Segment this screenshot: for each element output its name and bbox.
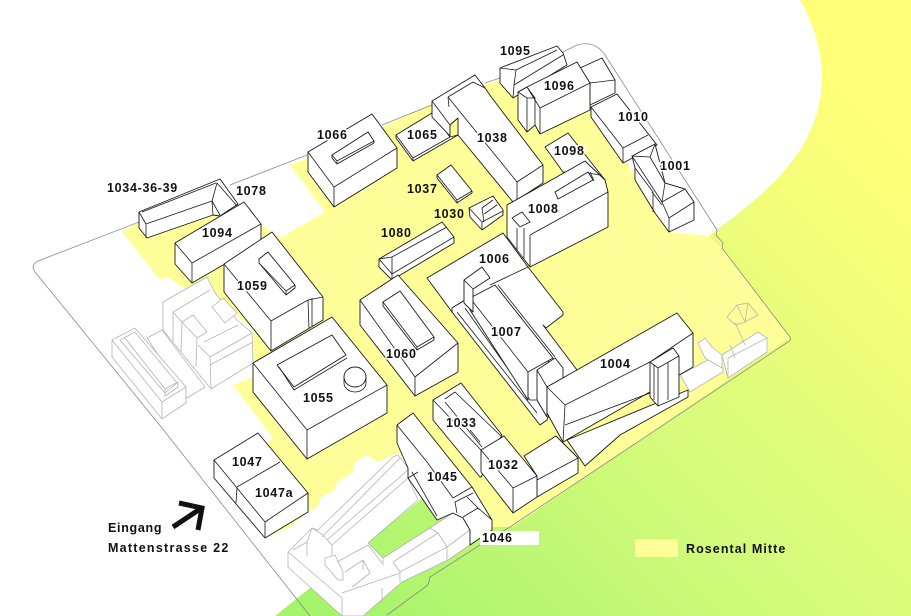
label 1007: 1007 (491, 325, 522, 339)
label 1008: 1008 (528, 202, 559, 216)
label 1038: 1038 (477, 131, 508, 145)
label 1095: 1095 (500, 44, 531, 58)
building 1047 and 1047a (214, 433, 308, 538)
label 1033: 1033 (446, 416, 477, 430)
plinth of building 1007 (452, 300, 563, 425)
label 1065: 1065 (407, 128, 438, 142)
legend label: Rosental Mitte (686, 542, 786, 556)
label 1006: 1006 (479, 252, 510, 266)
building 1065 (396, 113, 458, 161)
label 1078: 1078 (236, 184, 267, 198)
label 1047a: 1047a (255, 486, 294, 500)
building 1059 (224, 232, 323, 351)
yellow Rosental Mitte area (122, 80, 790, 538)
building 1098 (545, 133, 605, 180)
label 1098: 1098 (554, 144, 585, 158)
label 1094: 1094 (202, 226, 233, 240)
label 1032: 1032 (488, 458, 519, 472)
label 1037: 1037 (407, 182, 438, 196)
label 1047: 1047 (232, 455, 263, 469)
building behind 1096 (580, 58, 615, 105)
label 1055: 1055 (303, 391, 334, 405)
slab between blocks (147, 330, 205, 398)
label 1045: 1045 (427, 470, 458, 484)
icon: entrance arrow (173, 503, 202, 530)
building 1045 and 1046 (397, 413, 492, 545)
green to yellow gradient ground (275, 0, 911, 616)
label 1001: 1001 (660, 159, 691, 173)
gray neighbouring complex south (288, 455, 470, 616)
label 1030: 1030 (434, 207, 465, 221)
building 1095 (500, 46, 567, 98)
building 1010 (591, 94, 657, 163)
building 1080 (379, 222, 454, 280)
label 1096: 1096 (544, 79, 575, 93)
label 1034-36-39: 1034-36-39 (107, 181, 178, 195)
building 1066 (308, 114, 397, 207)
building 1096 (518, 62, 590, 134)
label 1059: 1059 (237, 279, 268, 293)
building 1038 (432, 75, 543, 202)
building 1032 extension (524, 436, 578, 497)
main block (163, 277, 253, 389)
label 1004: 1004 (600, 357, 631, 371)
gray neighbouring buildings north-west (112, 277, 253, 419)
west wing and long roof (288, 455, 470, 616)
building 1034-36-39 and 1078 (139, 179, 238, 238)
building 1030 (469, 196, 503, 230)
building 1033 (433, 383, 502, 477)
building 1032 (481, 436, 537, 513)
building 1007 (464, 267, 563, 417)
building 1004 (547, 313, 693, 466)
label 1060: 1060 (386, 347, 417, 361)
west block (112, 328, 186, 419)
labels (107, 44, 691, 545)
entrance text (108, 521, 229, 555)
white strip behind label 1046 (480, 531, 539, 545)
building 1001 (632, 144, 694, 232)
building 1094 (175, 202, 261, 283)
building 1037 (437, 165, 472, 203)
building 1060 (360, 275, 458, 396)
building 1006 (427, 233, 577, 400)
label 1066: 1066 (317, 128, 348, 142)
entrance line 1: Eingang (108, 521, 162, 535)
legend swatch (635, 539, 678, 557)
site boundary (33, 44, 791, 616)
label 1010: 1010 (618, 110, 649, 124)
entrance line 2: Mattenstrasse 22 (108, 541, 229, 555)
label 1046: 1046 (482, 531, 513, 545)
building 1008 (507, 161, 608, 267)
gray neighbouring buildings east (680, 303, 767, 392)
building 1055 (253, 317, 387, 459)
label 1080: 1080 (381, 226, 412, 240)
